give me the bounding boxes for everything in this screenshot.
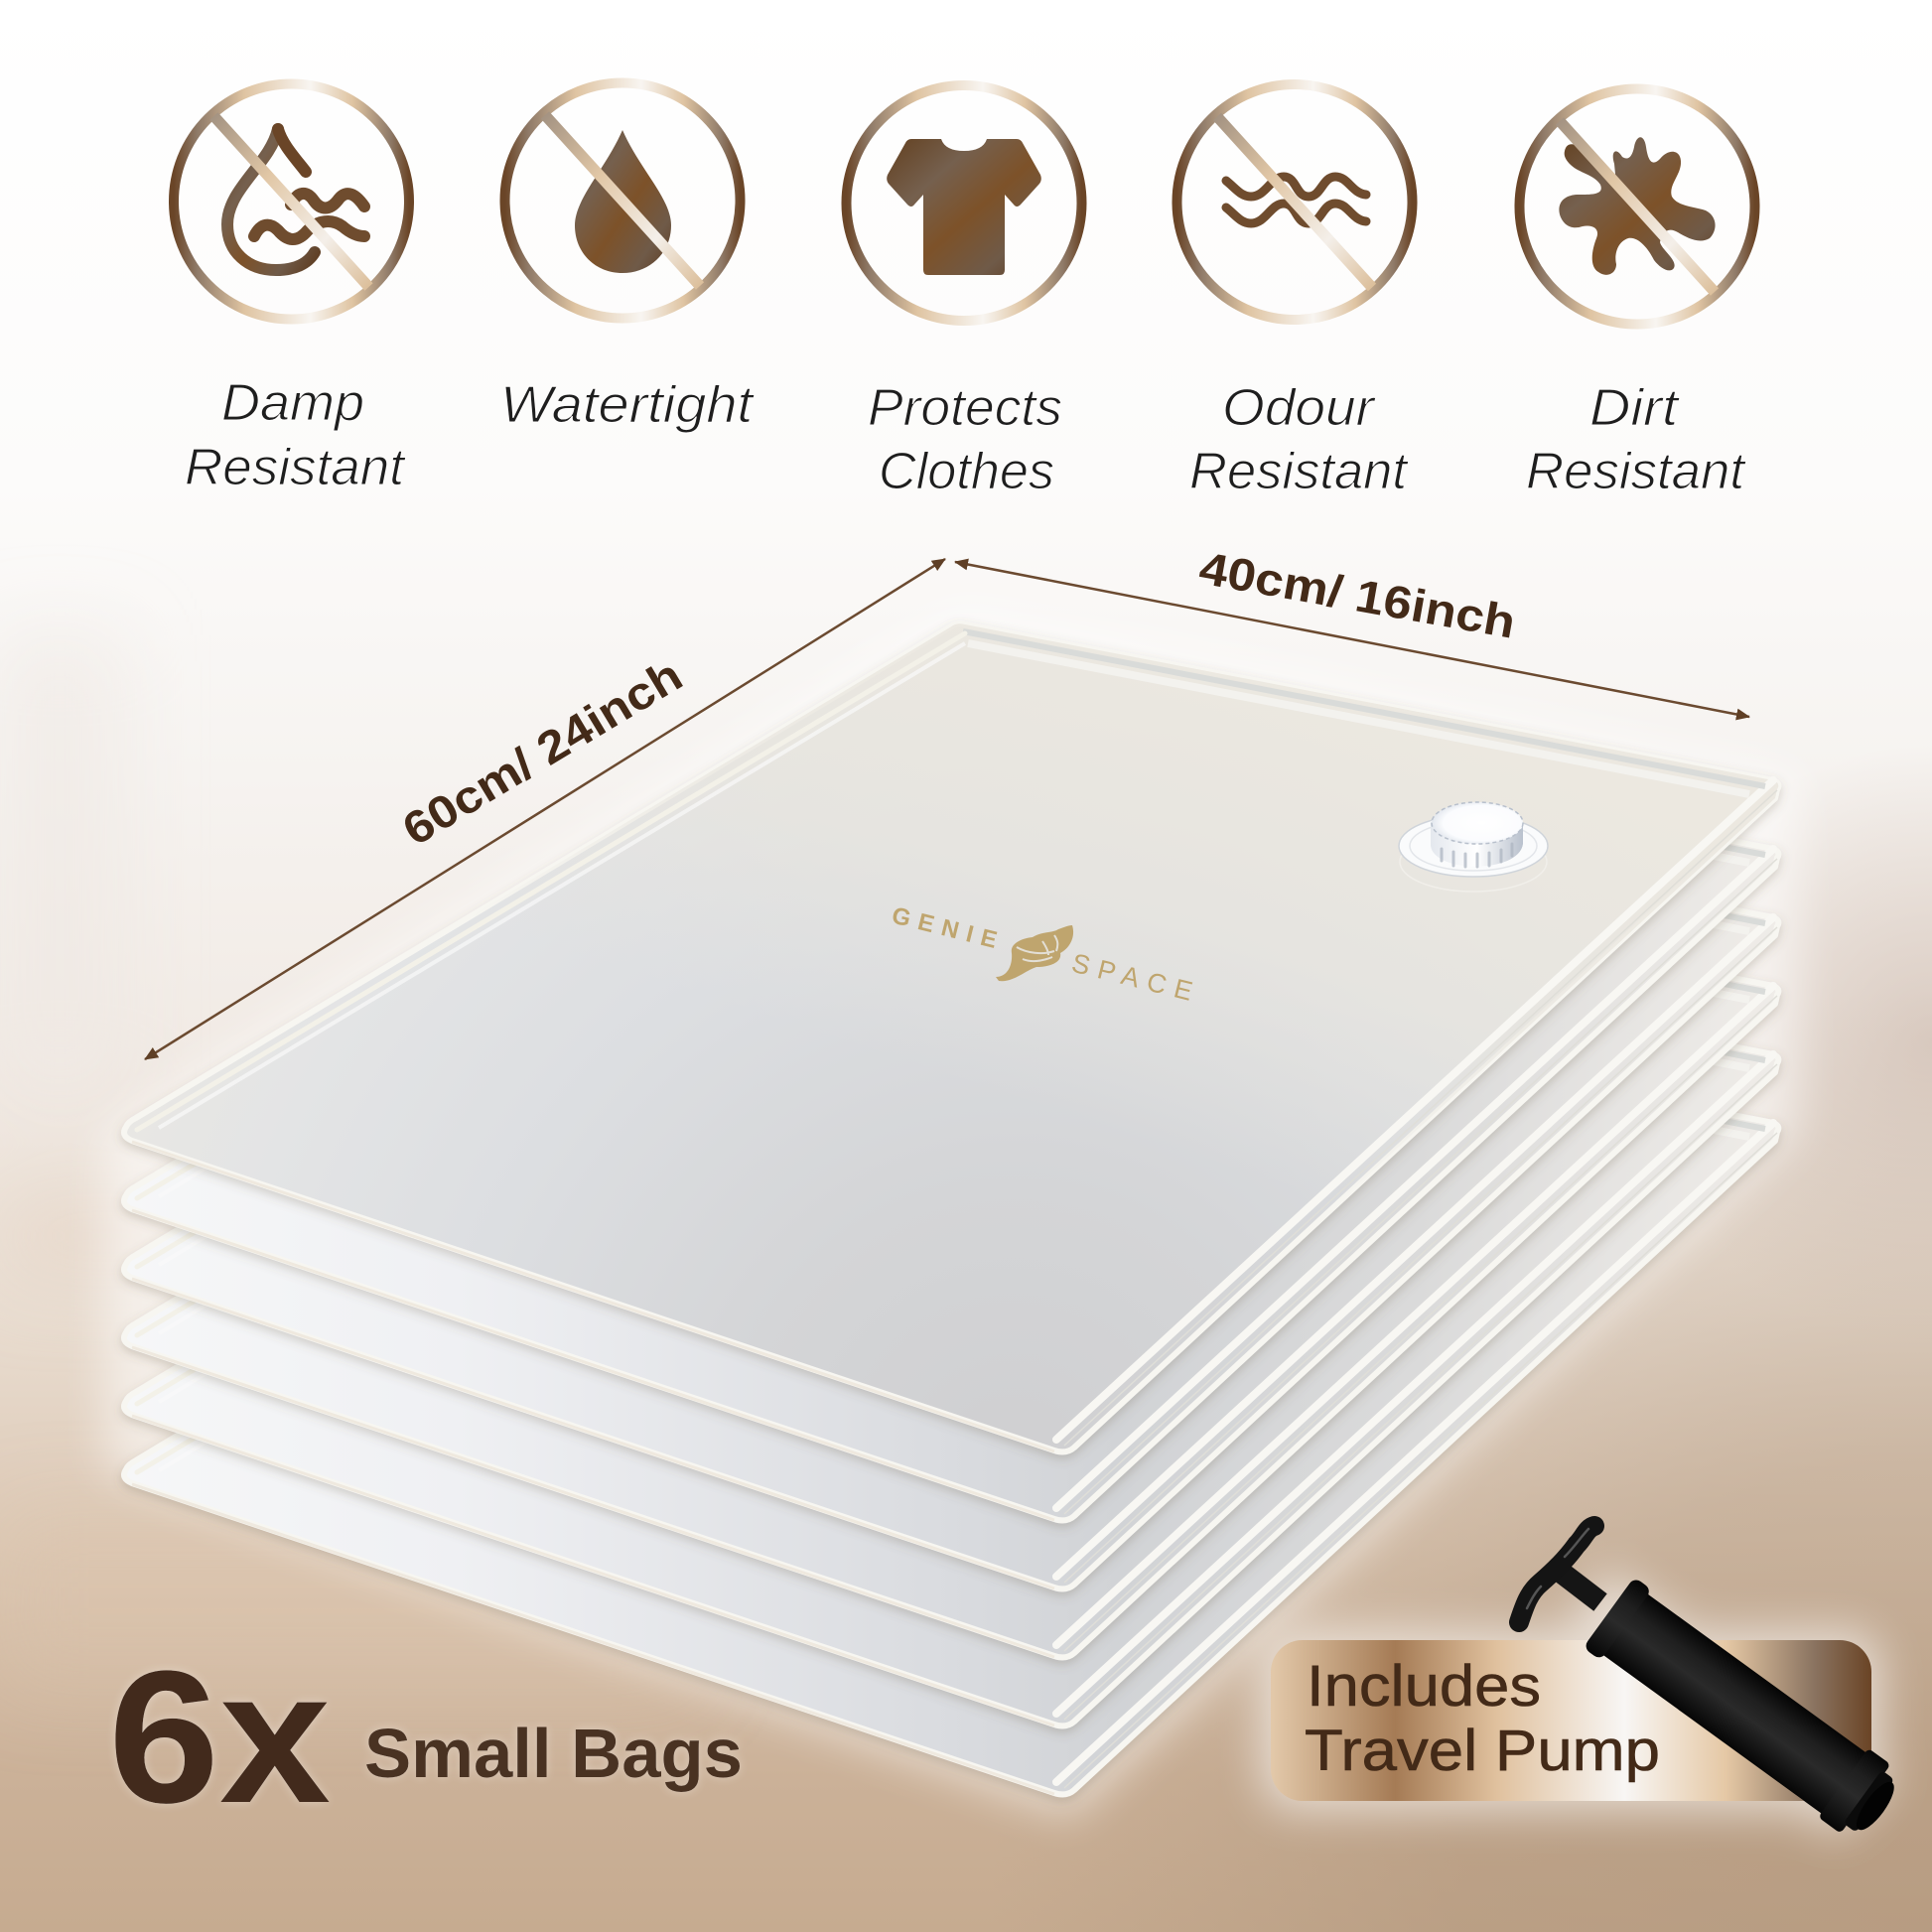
bag 3 [124, 760, 1778, 1588]
label: Damp Resistant: Damp [221, 374, 364, 432]
label: Watertight: Watertight [500, 376, 756, 434]
icon: protects clothes [846, 85, 1082, 321]
label: Odour Resistant: Odour [1222, 379, 1377, 437]
icon: damp resistant [174, 83, 409, 320]
brand logo: Genie Space [890, 902, 1195, 1007]
top vacuum bag [124, 623, 1778, 1451]
bag 5 [124, 897, 1778, 1725]
icon: black travel pump [1519, 1526, 1909, 1848]
dimension label: 40cm: 40cm/ 16inch [1195, 542, 1519, 648]
dimension label: 60cm: 60cm/ 24inch [393, 648, 691, 856]
dimension arrow: 60cm side [145, 559, 945, 1059]
bag 4 [124, 829, 1778, 1657]
icon: dirt resistant [1519, 89, 1755, 324]
icon: odour resistant [1177, 84, 1412, 320]
callout: includes travel pump: Travel Pump [1305, 1719, 1660, 1783]
bag 2 [124, 692, 1778, 1520]
label: Protects Clothes: Protects [868, 379, 1062, 437]
label: Dirt Resistant [1526, 379, 1747, 500]
callout: includes travel pump: Includes [1307, 1654, 1541, 1719]
bag 6 (bottom) [124, 966, 1778, 1794]
label: Protects Clothes [868, 379, 1062, 500]
label: Odour Resistant: Resistant [1189, 443, 1410, 500]
quantity label: Small Bags: Small Bags [364, 1715, 743, 1792]
icon: watertight [504, 83, 741, 318]
glow behind bag stack [104, 606, 1797, 1817]
label: Dirt Resistant: Dirt [1589, 379, 1681, 437]
brand logo: Genie Space: SPACE [1069, 948, 1195, 1007]
label: Odour Resistant [1189, 379, 1410, 500]
label: Dirt Resistant: Resistant [1526, 443, 1747, 500]
brand logo: Genie Space: GENIE [890, 902, 1000, 954]
label: Damp Resistant [185, 374, 407, 496]
quantity: 6x: 6x [108, 1632, 331, 1843]
label: Protects Clothes: Clothes [879, 443, 1054, 500]
dimension arrow: 40cm side [955, 562, 1749, 717]
callout: includes travel pump [1271, 1640, 1871, 1801]
glow behind travel pump callout [1261, 1569, 1896, 1837]
valve cap [1399, 802, 1548, 892]
label: Damp Resistant: Resistant [185, 439, 407, 496]
